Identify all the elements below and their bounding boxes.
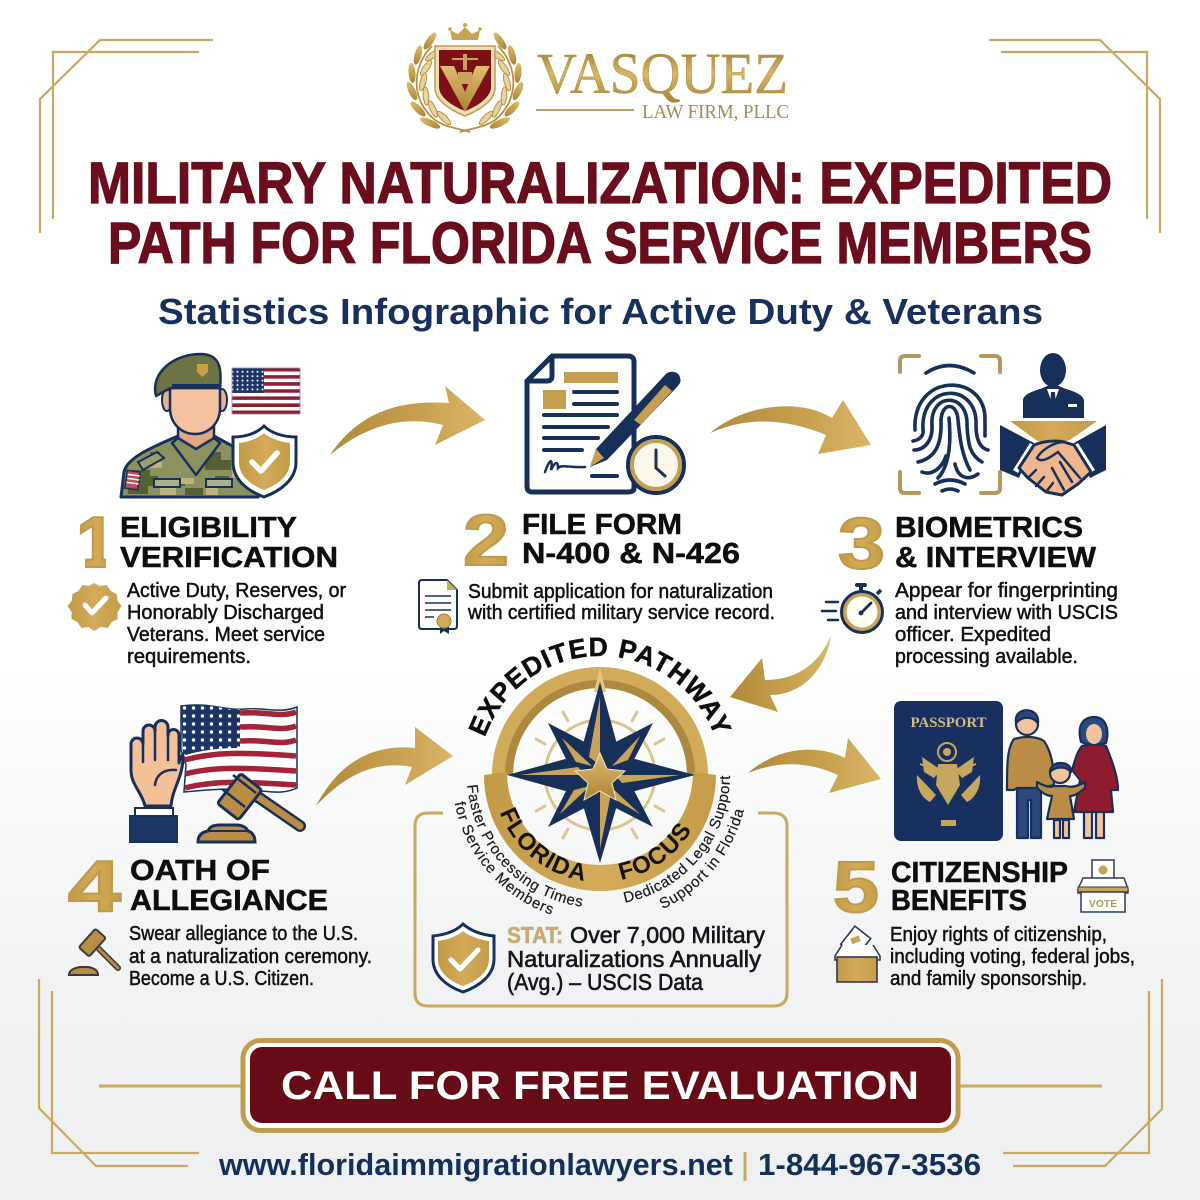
icon: waving flag — [181, 705, 297, 792]
contact line: www.floridaimmigrationlawyers.net — [218, 1147, 733, 1182]
icon: certified document — [419, 580, 457, 634]
title — [88, 151, 1112, 276]
heading: oath of allegiance: OATH OF — [130, 855, 270, 887]
icon: gavel — [198, 773, 300, 842]
icon: laurel wreath right — [460, 31, 525, 132]
text: eligibility description — [127, 580, 346, 668]
icon: vote box — [1078, 860, 1128, 912]
panel: stat box with compass — [414, 638, 788, 1008]
call to action banner — [99, 1040, 1102, 1130]
icon: stopwatch — [822, 583, 882, 632]
icon: US flag small — [232, 368, 300, 414]
icon: vote box: VOTE — [1089, 898, 1117, 910]
logo sub-line: LAW FIRM, PLLC — [642, 101, 789, 123]
icon: soldier with flag and shield — [121, 354, 258, 497]
stat box outline — [415, 813, 787, 1006]
curved caption: dedicated support: Dedicated Legal Support — [624, 776, 731, 903]
heading: eligibility verification — [120, 512, 338, 574]
contact line: 1-844-967-3536 — [758, 1147, 981, 1182]
icon: raised hand — [130, 721, 183, 842]
stat text: Over 7,000 Military — [570, 922, 765, 948]
panel: step 2 file form — [419, 356, 775, 634]
arrow: center to step 5 — [748, 738, 881, 793]
icon: laurel wreath left — [405, 31, 470, 132]
text: oath description: Swear allegiance to the U.S. — [129, 923, 358, 945]
heading: file form — [522, 509, 740, 570]
heading: biometrics and interview: BIOMETRICS — [895, 512, 1083, 544]
stat text: STAT: — [507, 922, 563, 948]
text: file form description — [467, 581, 775, 624]
icon: document with pen and clock — [527, 356, 684, 493]
text: oath description: Become a U.S. Citizen. — [129, 968, 314, 990]
icon: fingerprint in scan brackets — [900, 356, 1000, 493]
gold upper ring — [502, 678, 698, 775]
heading: oath of allegiance: ALLEGIANCE — [130, 885, 328, 917]
panel: step 3 biometrics and interview — [822, 353, 1118, 668]
heading: biometrics and interview — [895, 512, 1097, 574]
text: biometrics description — [895, 580, 1118, 668]
icon: handshake — [1000, 425, 1106, 495]
text: oath description — [129, 923, 372, 990]
icon: passport: PASSPORT — [910, 715, 986, 731]
arrow: step 2 to step 3 — [710, 400, 871, 454]
step number 1: 1 — [76, 503, 116, 583]
heading: citizenship benefits — [891, 857, 1068, 917]
text: file form description: Submit application for naturalization — [468, 581, 773, 603]
band label: Florida: FLORIDA — [500, 807, 584, 881]
gold lower band — [484, 772, 716, 891]
panel: step 1 eligibility verification — [68, 354, 346, 668]
arrow: step 3 to center — [730, 635, 831, 712]
icon: small ballot box — [835, 926, 880, 982]
heading: oath of allegiance — [130, 855, 328, 917]
stat text: Naturalizations Annually — [507, 946, 762, 972]
inner dial — [536, 702, 664, 838]
stat text — [507, 922, 765, 995]
heading: citizenship benefits: CITIZENSHIP — [891, 857, 1068, 889]
heading: biometrics and interview: & INTERVIEW — [895, 542, 1097, 574]
compass star — [507, 667, 695, 863]
panel: step 4 oath of allegiance — [68, 705, 372, 990]
panel: step 5 citizenship benefits — [833, 701, 1135, 990]
text: citizenship description: and family sponsorship. — [890, 968, 1087, 990]
text: citizenship description: including voting, federal jobs, — [890, 946, 1135, 968]
icon: gold badge check — [68, 583, 122, 631]
call to action banner: CALL FOR FREE EVALUATION — [281, 1064, 919, 1108]
curved heading: expedited pathway: EXPEDITED PATHWAY — [468, 638, 732, 736]
text: biometrics description: Appear for fingerprinting — [895, 580, 1118, 602]
icon: small gavel — [69, 929, 118, 975]
logo wordmark: VASQUEZ — [537, 41, 788, 106]
step number 4: 4 — [68, 847, 121, 927]
curved caption: faster processing: for Service Members — [454, 801, 553, 914]
icon: passport — [894, 701, 1003, 841]
logo: Vasquez Law Firm — [405, 23, 789, 132]
text: citizenship description — [890, 924, 1135, 990]
icon: family — [1007, 710, 1118, 838]
band label: Focus: FOCUS — [618, 824, 690, 880]
compass emblem — [484, 667, 716, 891]
text: biometrics description: officer. Expedited — [895, 624, 1051, 646]
heading: file form: N-400 & N-426 — [522, 538, 740, 570]
step number 2: 2 — [463, 501, 509, 581]
icon: gold shield check — [233, 426, 296, 497]
contact line — [218, 1147, 981, 1182]
icon: shield with V — [435, 46, 495, 116]
step number 5: 5 — [833, 848, 879, 928]
curved caption: dedicated support: Support in Florida — [660, 810, 744, 908]
icon: officer at podium — [1010, 353, 1097, 446]
text: file form description: with certified military service record. — [467, 602, 775, 624]
step number 3: 3 — [838, 504, 885, 584]
curved caption: faster processing: Faster Processing Times — [467, 785, 582, 906]
arrow: step 1 to step 2 — [330, 386, 485, 455]
icon: stat shield — [433, 924, 494, 992]
text: eligibility description: Active Duty, Reserves, or — [127, 580, 346, 602]
subtitle: Statistics Infographic for Active Duty & Veterans — [158, 291, 1043, 332]
text: eligibility description: Veterans. Meet service — [127, 624, 325, 646]
heading: eligibility verification: VERIFICATION — [120, 542, 338, 574]
heading: citizenship benefits: BENEFITS — [891, 885, 1027, 917]
arrow: step 4 to center — [316, 727, 453, 806]
text: citizenship description: Enjoy rights of citizenship, — [890, 924, 1107, 946]
text: biometrics description: processing available. — [895, 646, 1078, 668]
heading: eligibility verification: ELIGIBILITY — [120, 512, 297, 544]
text: eligibility description: Honorably Discharged — [127, 602, 324, 624]
text: oath description: at a naturalization ceremony. — [129, 946, 372, 968]
text: eligibility description: requirements. — [127, 646, 251, 668]
heading: file form: FILE FORM — [522, 509, 682, 541]
stat text: (Avg.) – USCIS Data — [507, 969, 703, 995]
icon: crown — [448, 23, 482, 40]
text: biometrics description: and interview with USCIS — [895, 602, 1118, 624]
